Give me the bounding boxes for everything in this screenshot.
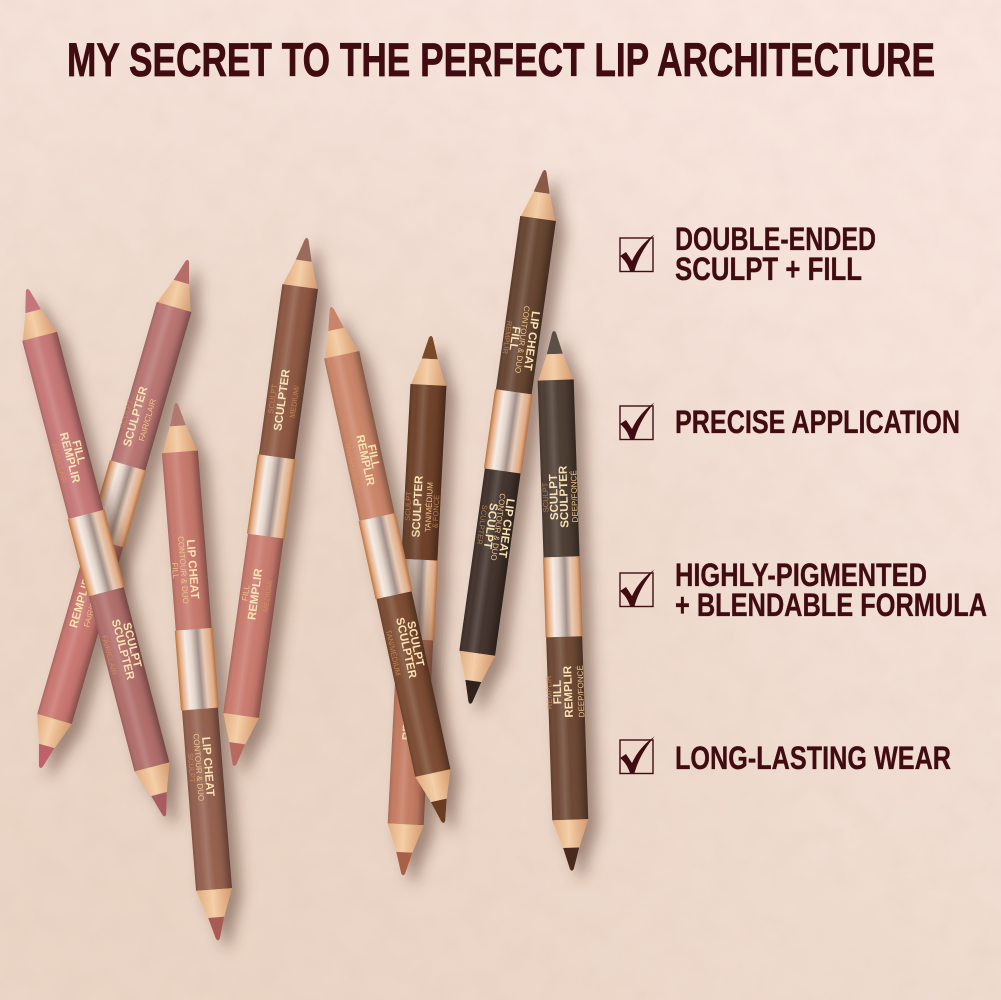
label: sculpter bbox=[264, 367, 303, 433]
metal ferrule bbox=[175, 628, 219, 711]
label: lip cheat lower: CONTOUR & DUO bbox=[191, 733, 206, 802]
label: sculpt bbox=[97, 616, 146, 685]
pencil: deep shade bbox=[533, 330, 591, 871]
label: lip cheat lower: CONTOUR & DUO bbox=[489, 493, 507, 561]
label: lip cheat upper: LIP CHEAT bbox=[184, 539, 200, 599]
pencil: tan shade bbox=[384, 335, 450, 876]
label: sculpt: FAIR/CLAIR bbox=[100, 634, 119, 677]
label: sculpter: SCULPT bbox=[118, 398, 135, 429]
benefit: long-lasting wear bbox=[620, 736, 951, 776]
icon: checkbox bbox=[620, 402, 654, 440]
label: fill: REMPLIR bbox=[353, 434, 376, 488]
label: remplir: REMPLIR bbox=[68, 576, 94, 629]
label: sculpter: SCULPTER bbox=[272, 368, 293, 432]
label: lip cheat lower: SCULPT bbox=[481, 502, 499, 549]
benefit: double-ended bbox=[620, 221, 876, 287]
pencil: tall dark shade bbox=[451, 167, 564, 706]
label: fill bbox=[48, 429, 91, 487]
label: remplir: FAIR/CLAIR bbox=[82, 584, 103, 628]
text: HIGHLY-PIGMENTED bbox=[675, 557, 927, 593]
label: sculpter: TAN/MÉDIUM bbox=[423, 482, 435, 532]
label: sculpt: SCULPT bbox=[541, 482, 551, 512]
pencil: medium peach shade bbox=[313, 303, 462, 827]
text: DOUBLE-ENDED bbox=[675, 221, 876, 257]
label: lip cheat upper bbox=[168, 535, 201, 605]
metal ferrule bbox=[358, 513, 413, 599]
metal ferrule bbox=[88, 460, 146, 548]
label: sculpter: SCULPT bbox=[266, 383, 279, 414]
label: fill: FILL bbox=[365, 443, 381, 470]
label: sculpter: SCULPTER bbox=[122, 385, 151, 448]
metal ferrule bbox=[396, 559, 438, 641]
label: sculpter bbox=[113, 382, 161, 451]
label: lip cheat upper bbox=[498, 303, 542, 375]
label: sculpter: SCULPTER bbox=[411, 475, 426, 538]
pencil: fair shade, front bbox=[9, 284, 183, 821]
label: lip cheat upper: CONTOUR & DUO bbox=[176, 536, 190, 604]
label: remplir bbox=[238, 566, 276, 622]
label: sculpter: SCULPT bbox=[403, 491, 413, 521]
label: sculpt: SCULPTER bbox=[109, 618, 136, 682]
pencil: medium shade bbox=[215, 235, 326, 769]
label: fill: REMPLIR bbox=[562, 665, 576, 718]
label: remplir: MEDIUM/ bbox=[261, 578, 274, 613]
label: sculpter bbox=[402, 474, 442, 539]
label: fill: REMPLIR bbox=[57, 431, 82, 485]
label: sculpt: SCULPTER bbox=[393, 616, 418, 680]
label: fill: REMPLIR bbox=[544, 675, 554, 709]
label: lip cheat upper: FILL bbox=[170, 562, 180, 579]
label: lip cheat lower: LIP CHEAT bbox=[199, 736, 216, 797]
icon: checkbox bbox=[620, 570, 654, 606]
label: fill bbox=[544, 665, 586, 719]
label: lip cheat lower bbox=[184, 732, 216, 802]
label: lip cheat lower: LIP CHEAT bbox=[496, 498, 516, 558]
label: lip cheat lower: SCULPTER bbox=[475, 504, 489, 546]
label: fill: FILL bbox=[552, 680, 564, 704]
label: fill: FAIR/CLAIR bbox=[50, 443, 69, 485]
label: sculpt: SCULPT bbox=[548, 474, 561, 520]
label: lip cheat lower bbox=[473, 490, 516, 562]
label: sculpt: SCULPT bbox=[404, 620, 426, 668]
benefit: pigmented formula bbox=[620, 557, 987, 623]
label: sculpt: SCULPTER bbox=[557, 465, 572, 528]
label: lip cheat upper: REMPLIR bbox=[500, 320, 514, 355]
label: sculpt: TAN/MÉDIUM bbox=[384, 629, 403, 677]
label: lip cheat lower: SCULPT bbox=[186, 753, 197, 783]
label: sculpter: & FONCÉ bbox=[431, 495, 441, 528]
label: fill bbox=[342, 432, 385, 490]
label: lip cheat upper: FILL bbox=[507, 326, 522, 351]
icon: checkbox bbox=[620, 736, 654, 774]
benefit: precise application bbox=[620, 402, 960, 440]
label: fill: TAN/MÉDIUM bbox=[343, 441, 362, 489]
label: lip cheat upper: LIP CHEAT bbox=[521, 310, 541, 371]
label: lip cheat upper: CONTOUR & DUO bbox=[513, 305, 531, 374]
metal ferrule bbox=[247, 454, 296, 539]
icon: checkbox bbox=[620, 234, 654, 272]
label: sculpt bbox=[540, 465, 580, 528]
metal ferrule bbox=[543, 556, 583, 637]
label: sculpt bbox=[382, 614, 428, 683]
metal ferrule bbox=[484, 389, 533, 474]
metal ferrule bbox=[68, 510, 125, 597]
label: sculpter: MEDIUM/ bbox=[288, 384, 301, 419]
label: remplir: REMPLIR bbox=[401, 687, 416, 740]
label: sculpt: DEEP/FONCÉ bbox=[569, 470, 580, 523]
label: remplir: REMPLIR bbox=[246, 567, 265, 621]
label: sculpt: SCULPT bbox=[120, 621, 143, 669]
label: remplir: FILL bbox=[240, 584, 251, 602]
label: fill: DEEP/FONCÉ bbox=[576, 665, 586, 717]
pencil: fair shade, rear bbox=[21, 254, 206, 773]
label: sculpter: FAIR/CLAIR bbox=[137, 398, 158, 442]
label: remplir bbox=[68, 576, 104, 632]
pencil: light medium shade bbox=[157, 402, 237, 942]
label: fill: FILL bbox=[69, 439, 87, 466]
text: SCULPT + FILL bbox=[675, 251, 862, 287]
